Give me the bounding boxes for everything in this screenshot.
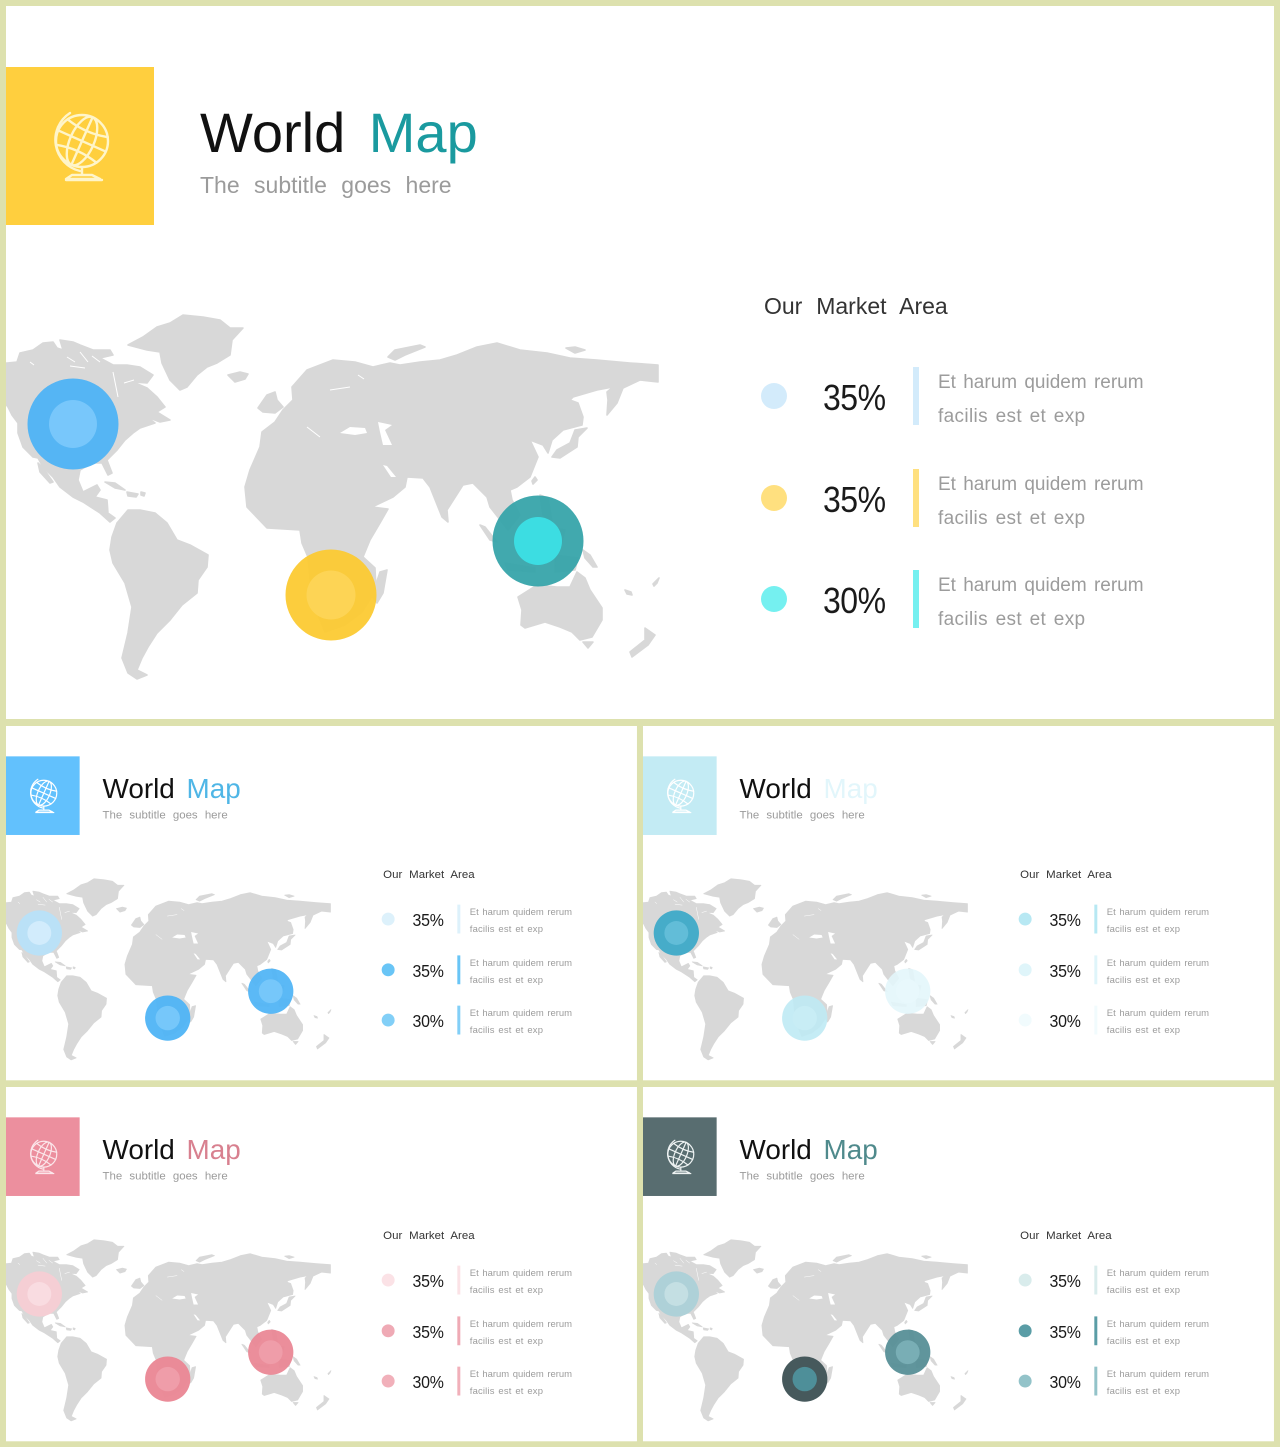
icon box: yellow globe [6,67,154,225]
heading: World Map with subtitle: World Map [740,1134,878,1165]
world map with three markers [6,1239,332,1422]
legend row 2: facilis est et exp [470,975,543,985]
icon box: slate globe [643,1117,717,1196]
legend row 3 [761,570,1144,630]
legend row 3: 30% [413,1011,444,1031]
world map with three markers [6,314,660,680]
legend row 2: facilis est et exp [1107,1336,1180,1346]
legend row 3: Et harum quidem rerum [1107,1369,1209,1379]
legend row 3: Et harum quidem rerum [470,1369,572,1379]
world map with three markers [6,878,332,1060]
world map with three markers [643,878,968,1060]
legend row 3: facilis est et exp [938,608,1085,630]
heading: World Map with subtitle [740,773,878,821]
legend row 2: 35% [823,480,886,520]
legend row 3: 30% [413,1372,444,1392]
heading: World Map with subtitle: World Map [103,773,241,804]
legend row 1 [382,1266,572,1295]
legend row 1: 35% [1050,910,1081,930]
panel: main yellow world map slide [6,6,1274,719]
legend row 2: facilis est et exp [938,508,1085,528]
panel: pale cyan variant slide [643,726,1274,1080]
legend row 2: 35% [1050,1322,1081,1342]
legend heading: Our Market Area [764,292,948,318]
heading: World Map with subtitle: The subtitle goes here [740,1169,865,1182]
legend row 3: facilis est et exp [470,1025,543,1035]
legend row 1 [382,904,572,934]
legend row 3: 30% [1050,1011,1081,1031]
legend row 1: 35% [1050,1271,1081,1291]
legend heading: Our Market Area [383,1228,475,1241]
panel: slate teal variant slide [643,1087,1274,1441]
icon box: pale cyan globe [643,756,717,835]
legend row 3 [1018,1366,1209,1396]
legend heading: Our Market Area [1020,1228,1112,1241]
heading: World Map with subtitle: The subtitle goes here [103,808,228,821]
legend row 1: facilis est et exp [1107,1285,1180,1295]
icon box: pink globe [6,1117,80,1196]
legend row 2: 35% [413,961,444,981]
legend row 2: Et harum quidem rerum [470,958,572,968]
legend row 1: 35% [413,910,444,930]
legend row 1: facilis est et exp [470,1285,543,1295]
world map with three markers [643,1239,968,1422]
legend row 2 [382,1316,572,1346]
legend row 1: Et harum quidem rerum [470,907,572,917]
legend row 1: 35% [823,378,886,418]
legend row 3: facilis est et exp [1107,1025,1180,1035]
legend heading: Our Market Area [1020,867,1112,880]
legend row 1: facilis est et exp [470,924,543,934]
legend heading: Our Market Area [383,867,475,880]
legend row 1 [1018,904,1209,934]
heading: World Map with subtitle [102,1134,241,1182]
heading: World Map with subtitle: The subtitle goes here [740,808,865,821]
heading: World Map with subtitle [102,773,241,821]
legend row 3: Et harum quidem rerum [1107,1008,1209,1018]
legend row 1: Et harum quidem rerum [1107,1268,1209,1278]
legend row 2: 35% [1050,961,1081,981]
heading: World Map with subtitle [200,101,478,198]
heading: World Map with subtitle [740,1134,878,1182]
legend row 1: facilis est et exp [1107,924,1180,934]
heading: World Map with subtitle: The subtitle goes here [200,172,452,198]
legend row 1 [761,367,1144,426]
legend row 3: Et harum quidem rerum [938,574,1144,596]
legend row 2: 35% [413,1322,444,1342]
icon box: blue globe [6,756,80,835]
heading: World Map with subtitle: World Map [103,1134,241,1165]
legend row 3 [1018,1006,1209,1035]
legend row 2: facilis est et exp [470,1336,543,1346]
legend row 1 [1018,1266,1209,1295]
panel: pink variant slide [6,1087,637,1441]
heading: World Map with subtitle: The subtitle goes here [103,1169,228,1182]
legend row 2: facilis est et exp [1107,975,1180,985]
legend row 1: Et harum quidem rerum [470,1268,572,1278]
legend row 2 [761,469,1144,528]
legend row 2: Et harum quidem rerum [938,474,1144,494]
panel: blue variant slide [6,726,637,1080]
legend row 2: Et harum quidem rerum [470,1319,572,1329]
legend row 1: Et harum quidem rerum [938,372,1144,392]
legend row 1: facilis est et exp [938,406,1085,426]
legend row 3: 30% [823,581,886,621]
legend row 1: 35% [413,1271,444,1291]
legend row 3: facilis est et exp [470,1386,543,1396]
legend row 3: facilis est et exp [1107,1386,1180,1396]
legend row 3: Et harum quidem rerum [470,1008,572,1018]
legend row 2: Et harum quidem rerum [1107,1319,1209,1329]
heading: World Map with subtitle: World Map [200,101,478,164]
legend row 2 [1018,956,1209,985]
legend row 3 [382,1366,572,1396]
legend row 2 [1018,1316,1209,1346]
legend row 2 [382,955,572,985]
heading: World Map with subtitle: World Map [740,773,878,804]
legend row 2: Et harum quidem rerum [1107,958,1209,968]
legend row 3: 30% [1050,1372,1081,1392]
legend row 3 [382,1006,572,1035]
legend row 1: Et harum quidem rerum [1107,907,1209,917]
